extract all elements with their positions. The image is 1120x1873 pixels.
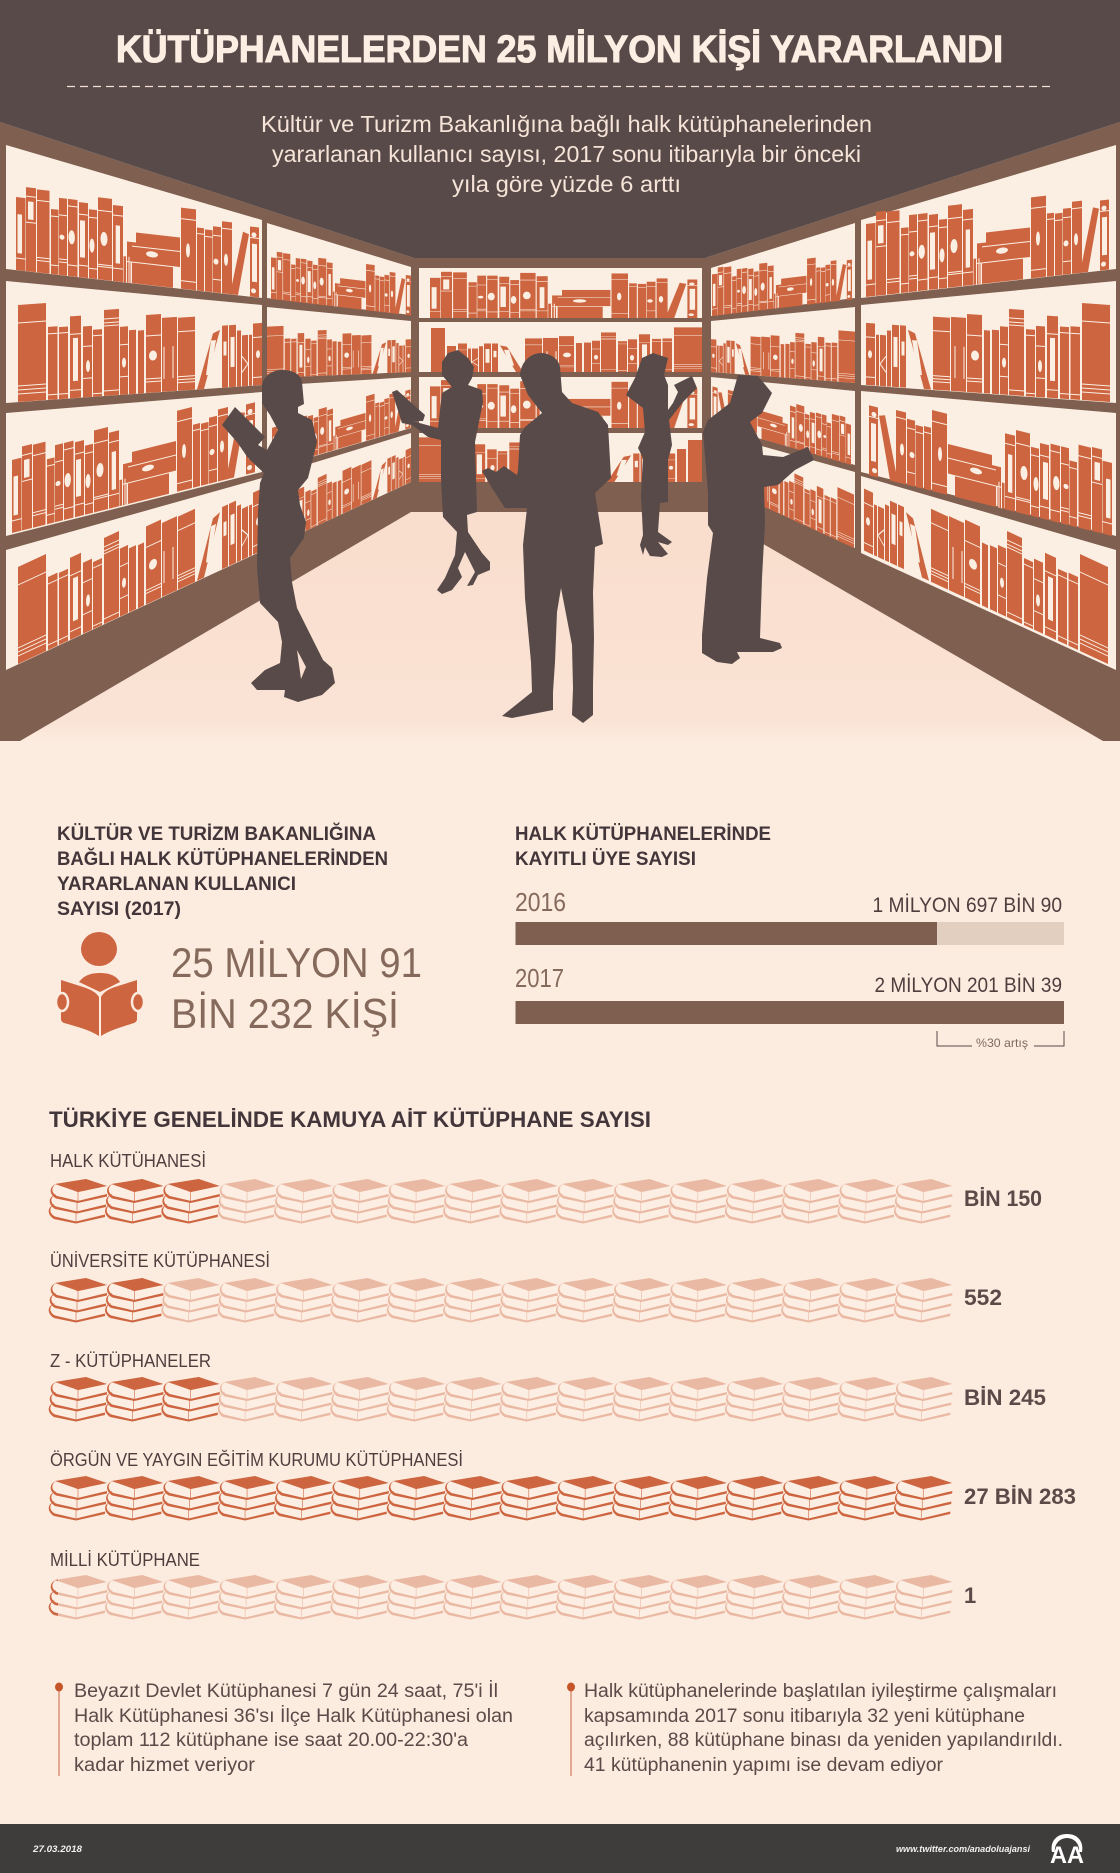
silhouette: man in center [482,353,611,723]
subtitle [261,111,872,197]
social link: www.twitter.com/anadoluajansi [896,1844,1030,1855]
row: milli [49,1550,976,1620]
row: üniversite: ÜNİVERSİTE KÜTÜPHANESİ [50,1251,270,1271]
silhouette: woman in back, right [626,353,697,557]
bar 2017 [515,963,1064,1024]
row: halk: BİN 150 [964,1186,1042,1211]
floor [0,500,1120,741]
big number: BİN 232 KİŞİ [171,990,399,1037]
row: örgün ve yaygın [49,1449,1076,1520]
bar 2016: 1 MİLYON 697 BİN 90 [872,894,1062,917]
heading: users: YARARLANAN KULLANICI [57,873,296,895]
bar 2017: 2017 [515,963,564,993]
row: milli: MİLLİ KÜTÜPHANE [50,1550,200,1570]
header panel [0,0,1120,258]
title: KÜTÜPHANELERDEN 25 MİLYON KİŞİ YARARLANDI [116,28,1003,71]
note: left: Halk Kütüphanesi 36'sı İlçe Halk Kütüphanesi olan [74,1706,513,1727]
bar 2017: 2 MİLYON 201 BİN 39 [874,974,1062,997]
row: milli: 1 [964,1583,976,1608]
heading: users: BAĞLI HALK KÜTÜPHANELERİNDEN [57,847,388,870]
note: right [567,1681,1063,1776]
panel: registered members [515,822,1064,1050]
shelf frame [0,122,1120,741]
library illustration [0,122,1120,741]
panel: public library counts [49,1107,1076,1620]
row: örgün ve yaygın: ÖRGÜN VE YAYGIN EĞİTİM KURUMU KÜTÜPHANESİ [50,1449,463,1470]
heading: members [515,822,771,870]
icon: person reading [56,932,144,1036]
heading: users: KÜLTÜR VE TURİZM BAKANLIĞINA [57,822,376,845]
note: right: Halk kütüphanelerinde başlatılan iyileştirme çalışmaları [584,1681,1057,1702]
big number [171,939,422,1037]
increase bracket: %30 artış [976,1036,1028,1050]
note: left: Beyazıt Devlet Kütüphanesi 7 gün 24 saat, 75'i İl [74,1681,498,1702]
note: right: 41 kütüphanenin yapımı ise devam ediyor [584,1755,944,1776]
note: left [55,1681,513,1776]
note: left: kadar hizmet veriyor [74,1755,256,1776]
bar 2016 [515,887,1064,945]
row: halk [49,1151,1042,1224]
heading: members: HALK KÜTÜPHANELERİNDE [515,822,771,845]
heading: users [57,822,388,920]
subtitle: yararlanan kullanıcı sayısı, 2017 sonu itibarıyla bir önceki [272,141,861,167]
bar 2016: 2016 [515,887,566,917]
row: z-kütüphaneler: BİN 245 [964,1385,1046,1410]
panel: library users 2017 [56,822,422,1037]
subtitle: Kültür ve Turizm Bakanlığına bağlı halk kütüphanelerinden [261,111,872,137]
shelf backgrounds [6,145,1116,670]
row: z-kütüphaneler [49,1351,1046,1422]
heading: members: KAYITLI ÜYE SAYISI [515,847,696,870]
footer [0,1824,1120,1873]
row: örgün ve yaygın: 27 BİN 283 [964,1484,1076,1509]
row: halk: HALK KÜTÜHANESİ [50,1151,206,1171]
row: üniversite: 552 [964,1285,1002,1310]
heading: public libraries: TÜRKİYE GENELİNDE KAMUYA AİT KÜTÜPHANE SAYISI [49,1107,651,1132]
note: right: açılırken, 88 kütüphane binası da yeniden yapılandırıldı. [584,1730,1063,1751]
row: üniversite [49,1251,1002,1322]
silhouette: woman in back, left [392,350,490,594]
big number: 25 MİLYON 91 [171,939,422,986]
row: z-kütüphaneler: Z - KÜTÜPHANELER [50,1351,211,1371]
increase bracket [937,1031,1064,1050]
note: right: kapsamında 2017 sonu itibarıyla 32 yeni kütüphane [584,1706,1025,1727]
date: 27.03.2018 [32,1844,83,1855]
heading: users: SAYISI (2017) [57,898,181,920]
icon: agency logo: AA [1050,1842,1084,1869]
note: left: toplam 112 kütüphane ise saat 20.00-22:30'a [74,1730,468,1751]
silhouette: man at right [702,375,814,664]
subtitle: yıla göre yüzde 6 arttı [452,171,681,197]
silhouette: woman in front, left [222,370,335,702]
books on shelves [12,186,1112,664]
